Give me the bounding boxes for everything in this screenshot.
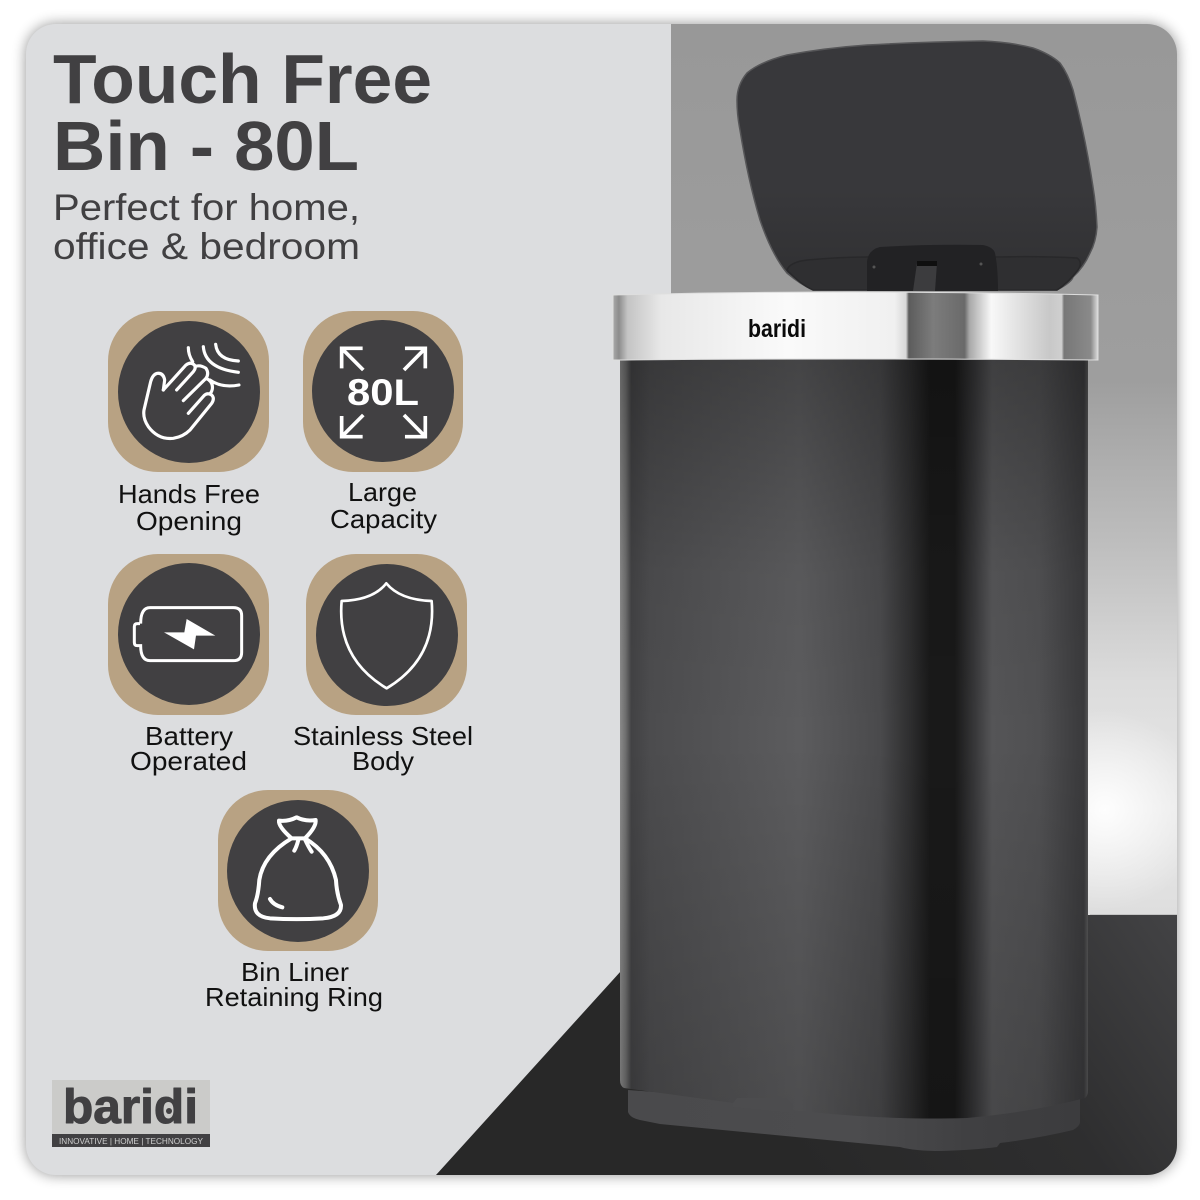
label: Operated [130,746,247,776]
icon: shield [341,583,432,688]
body [620,358,1088,1118]
feature: hands free opening [108,311,269,536]
label: Capacity [330,504,437,534]
title: Bin - 80L [53,107,359,185]
label [118,479,260,536]
body shading [620,358,1088,1118]
brand logo [52,1080,210,1147]
icon: battery [134,608,242,661]
open lid [737,41,1097,291]
icon: 80L with arrows [342,348,425,437]
label: Bin Liner [241,957,349,987]
base [628,1090,1080,1151]
label: Stainless Steel [293,721,473,751]
title: Touch Free [53,40,432,118]
feature: stainless steel body [293,554,473,776]
icon: tied bag [255,817,341,919]
label [130,721,247,776]
product: bin [613,41,1098,1151]
subtitle [53,187,360,267]
lid hinge [867,245,998,291]
steel ring [613,292,1098,360]
label [205,957,383,1012]
ring logo: baridi [748,315,806,343]
lid rim [787,257,1080,290]
base seam [733,1098,793,1113]
icon: waving hand [144,344,239,439]
label: Battery [145,721,233,751]
brand logo: INNOVATIVE | HOME | TECHNOLOGY [59,1136,203,1146]
label [293,721,473,776]
icon: 80L with arrows: 80L [347,372,419,413]
label: Hands Free [118,479,260,509]
label [330,477,437,534]
label: Large [348,477,417,507]
feature: bin liner retaining ring [205,790,383,1012]
label: Retaining Ring [205,982,383,1012]
subtitle: office & bedroom [53,226,360,267]
label: Opening [136,506,242,536]
brand logo: baridi [63,1081,198,1134]
feature: battery operated [108,554,269,776]
subtitle: Perfect for home, [53,187,360,228]
label: Body [352,746,414,776]
title [53,40,432,185]
feature: large capacity [303,311,463,534]
